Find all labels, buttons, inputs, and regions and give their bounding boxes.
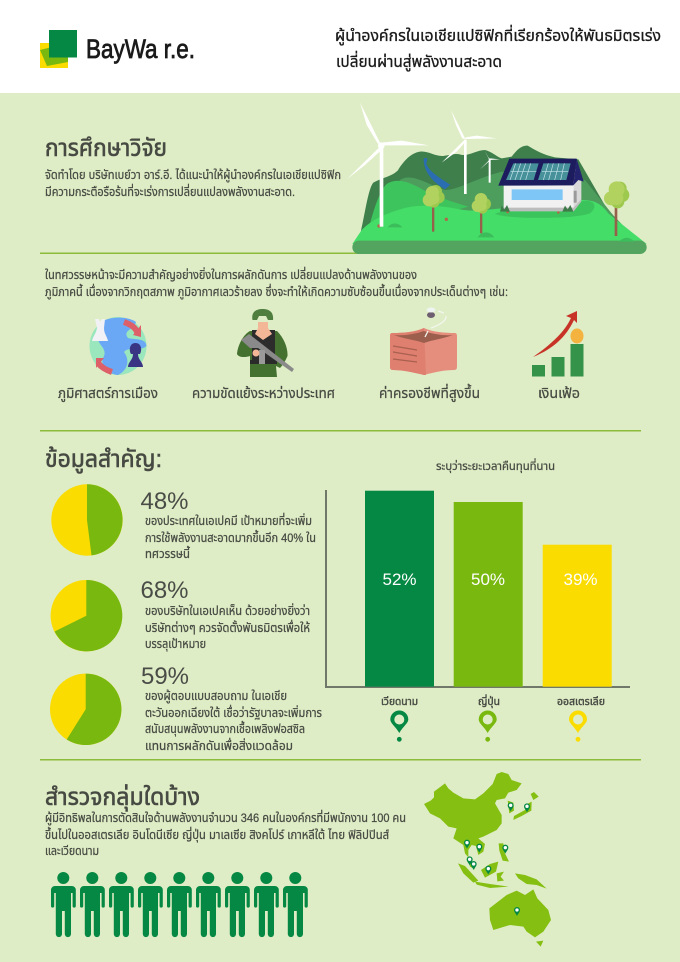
chart title: ระบุว่าระยะเวลาคืนทุนที่นาน <box>436 458 555 473</box>
icon: cost of living wallet <box>390 308 457 375</box>
illustration: wind turbines, hills and solar house <box>347 103 647 254</box>
stat: 68%: บรรลุเป้าหมาย <box>145 637 206 651</box>
stat: 68%: 68% <box>140 577 188 604</box>
stat: 48%: การใช้พลังงานสะอาดมากขึ้นอีก 40% ใน <box>145 529 316 545</box>
stat: 59%: แทนการผลักดันเพื่อสิ่งแวดล้อม <box>145 737 293 753</box>
bar chart <box>326 458 630 742</box>
header band <box>0 0 680 93</box>
stat: 48%: ของประเทศในเอเปคมี เป้าหมายที่จะเพิ่ม <box>145 512 312 528</box>
stat: 59%: สนับสนุนพลังงานจากเชื้อเพลิงฟอสซิล <box>145 720 305 736</box>
category labels: ญี่ปุ่น <box>478 694 500 708</box>
category labels: ออสเตรเลีย <box>557 696 605 708</box>
research description: มีความกระตือรือร้นที่จะเร่งการเปลี่ยนแปลงพลังงานสะอาด. <box>45 183 295 199</box>
people icons <box>51 872 308 937</box>
wind turbines <box>347 103 500 227</box>
intro paragraph: ภูมิภาคนี้ เนื่องจากวิกฤตสภาพ ภูมิอากาศเลวร้ายลง ซึ่งจะทำให้เกิดความซับซ้อนขึ้นเนื่องจากประเด็นต่างๆ เช่น: <box>45 283 508 299</box>
title: ผู้นำองค์กรในเอเชียแปซิฟิกที่เรียกร้องให้พันธมิตรเร่ง <box>335 24 661 45</box>
bar: Japan: 50% <box>471 570 505 589</box>
icon labels: ความขัดแย้งระหว่างประเทศ <box>192 385 335 401</box>
survey description: และเวียดนาม <box>45 844 99 858</box>
logo: BayWa r.e. <box>86 34 195 64</box>
stat: 68%: ของบริษัทในเอเปคเห็น ด้วยอย่างยิ่งว่า <box>145 603 310 618</box>
bar: Australia: 39% <box>563 570 598 589</box>
heading: key data: ข้อมูลสำคัญ: <box>45 446 162 474</box>
survey description <box>45 809 406 858</box>
bar: Vietnam: 52% <box>382 570 417 589</box>
icon labels: ค่าครองชีพที่สูงขึ้น <box>379 383 480 402</box>
research description <box>45 168 341 199</box>
category labels: เวียดนาม <box>381 696 418 708</box>
title <box>335 24 661 71</box>
stat: 68% <box>51 577 310 651</box>
stat: 59% <box>50 663 322 753</box>
map pins <box>464 802 530 916</box>
intro paragraph <box>45 266 508 299</box>
category labels <box>381 694 605 708</box>
title: เปลี่ยนผ่านสู่พลังงานสะอาด <box>336 50 502 71</box>
icon labels: ภูมิศาสตร์การเมือง <box>58 385 158 402</box>
stat: 59%: ของผู้ตอบแบบสอบถาม ในเอเชีย <box>145 689 287 703</box>
river <box>424 158 450 189</box>
stat: 68%: บริษัทต่างๆ ควรจัดตั้งพันธมิตรเพื่อให้ <box>145 619 310 635</box>
stat: 48% <box>51 484 316 561</box>
heading: survey groups: สำรวจกลุ่มใดบ้าง <box>45 783 200 812</box>
survey description: ผู้มีอิทธิพลในการตัดสินใจด้านพลังงานจำนวน 346 คนในองค์กรที่มีพนักงาน 100 คน <box>45 809 406 825</box>
pins <box>390 710 587 742</box>
stat: 48%: 48% <box>140 488 188 515</box>
icon: inflation chart <box>532 311 584 376</box>
stat: 59%: 59% <box>141 663 189 690</box>
icon: soldier <box>237 309 294 377</box>
heading: research: การศึกษาวิจัย <box>45 135 167 162</box>
icon labels <box>58 383 580 402</box>
bar: Japan <box>454 502 523 687</box>
bar: Vietnam <box>365 491 434 687</box>
stat: 59%: ตะวันออกเฉียงใต้ เชื่อว่ารัฐบาลจะเพิ่มการ <box>145 704 322 720</box>
bar: Australia <box>543 545 612 687</box>
intro paragraph: ในทศวรรษหน้าจะมีความสำคัญอย่างยิ่งในการผลักดันการ เปลี่ยนแปลงด้านพลังงานของ <box>45 266 417 282</box>
survey description: ขึ้นไปในออสเตรเลีย อินโดนีเซีย ญี่ปุ่น มาเลเซีย สิงคโปร์ เกาหลีใต้ ไทย ฟิลิปปินส์ <box>45 826 389 842</box>
map: Asia Pacific <box>424 772 551 947</box>
stat: 48%: ทศวรรษนี้ <box>145 545 190 561</box>
icon labels: เงินเฟ้อ <box>538 385 580 401</box>
logo <box>40 30 195 68</box>
icon: geopolitics globe <box>90 317 146 375</box>
research description: จัดทำโดย บริษัทเบย์วา อาร์.อี. ได้แนะนำให้ผู้นำองค์กรในเอเชียแปซิฟิก <box>45 168 341 182</box>
solar house <box>498 159 584 211</box>
trees <box>423 181 629 236</box>
